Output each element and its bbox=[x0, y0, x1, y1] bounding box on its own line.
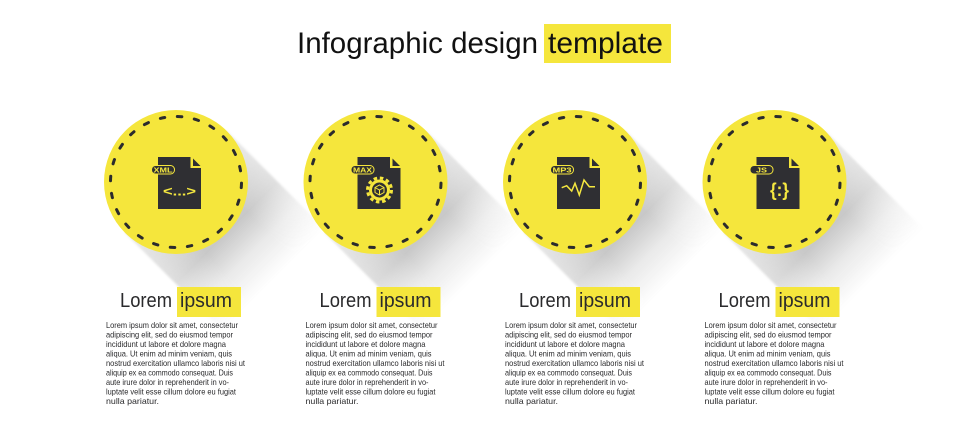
body text: aliqua. Ut enim ad minim veniam, quis bbox=[106, 348, 232, 358]
dashed ring bbox=[310, 116, 441, 248]
body text: aliquip ex ea commodo consequat. Duis bbox=[704, 368, 832, 378]
body text: aute irure dolor in reprehenderit in vo- bbox=[505, 377, 628, 387]
body text: luptate velit esse cillum dolore eu fugiat bbox=[704, 386, 835, 396]
heading: ipsum bbox=[778, 290, 830, 312]
heading: Lorem bbox=[519, 290, 571, 312]
long shadow bbox=[724, 132, 905, 292]
body text: aute irure dolor in reprehenderit in vo- bbox=[704, 377, 828, 387]
icon: XML file: XML bbox=[154, 166, 173, 175]
long shadow bbox=[325, 132, 506, 292]
panel: MAX file bbox=[304, 110, 524, 406]
icon: JS file bbox=[750, 157, 800, 209]
heading bbox=[718, 287, 840, 317]
title: Infographic design bbox=[297, 27, 538, 60]
body text: nulla pariatur. bbox=[106, 396, 159, 406]
icon: XML file bbox=[152, 157, 201, 209]
body text: aute irure dolor in reprehenderit in vo- bbox=[306, 377, 429, 387]
yellow circle bbox=[503, 110, 647, 254]
panel: XML file bbox=[104, 110, 325, 406]
yellow circle bbox=[304, 110, 448, 254]
body text: adipiscing elit, sed do eiusmod tempor bbox=[704, 330, 832, 340]
yellow circle bbox=[104, 110, 248, 254]
body text: incididunt ut labore et dolore magna bbox=[306, 339, 426, 349]
body text: nulla pariatur. bbox=[505, 396, 558, 406]
body text: nostrud exercitation ullamco laboris nisi ut bbox=[106, 358, 246, 368]
body text: aliquip ex ea commodo consequat. Duis bbox=[505, 368, 632, 378]
heading bbox=[320, 287, 440, 317]
panel: MP3 file bbox=[503, 110, 724, 406]
heading: ipsum bbox=[579, 290, 631, 312]
body text: luptate velit esse cillum dolore eu fugiat bbox=[106, 386, 237, 396]
body text: incididunt ut labore et dolore magna bbox=[505, 339, 625, 349]
body text: Lorem ipsum dolor sit amet, consectetur bbox=[106, 320, 238, 330]
body text: Lorem ipsum dolor sit amet, consectetur bbox=[505, 320, 637, 330]
heading: ipsum bbox=[180, 290, 232, 312]
long shadow bbox=[126, 132, 306, 292]
body text: aliquip ex ea commodo consequat. Duis bbox=[306, 368, 432, 378]
icon: MP3 file bbox=[550, 157, 600, 209]
body text: nostrud exercitation ullamco laboris nisi ut bbox=[704, 358, 844, 368]
body text: adipiscing elit, sed do eiusmod tempor bbox=[306, 330, 433, 340]
body text: luptate velit esse cillum dolore eu fugiat bbox=[505, 386, 636, 396]
panel: JS file bbox=[702, 110, 924, 406]
heading bbox=[519, 287, 640, 317]
yellow circle bbox=[702, 110, 846, 254]
body text: Lorem ipsum dolor sit amet, consectetur bbox=[306, 320, 438, 330]
body text: aliqua. Ut enim ad minim veniam, quis bbox=[505, 348, 631, 358]
dashed ring bbox=[110, 116, 242, 248]
heading: Lorem bbox=[718, 290, 770, 312]
body text: nulla pariatur. bbox=[306, 396, 358, 406]
body text: Lorem ipsum dolor sit amet, consectetur bbox=[704, 320, 837, 330]
body text bbox=[704, 320, 844, 406]
icon: XML file: <...> bbox=[163, 184, 197, 198]
body text bbox=[306, 320, 445, 406]
body text: nostrud exercitation ullamco laboris nisi ut bbox=[306, 358, 445, 368]
icon: MP3 file: MP3 bbox=[552, 166, 572, 175]
long shadow bbox=[524, 132, 706, 292]
heading bbox=[120, 287, 241, 317]
body text: incididunt ut labore et dolore magna bbox=[704, 339, 825, 349]
title: template bbox=[548, 27, 663, 60]
body text: adipiscing elit, sed do eiusmod tempor bbox=[106, 330, 233, 340]
body text: aliqua. Ut enim ad minim veniam, quis bbox=[306, 348, 432, 358]
body text: adipiscing elit, sed do eiusmod tempor bbox=[505, 330, 632, 340]
body text bbox=[106, 320, 246, 406]
body text: luptate velit esse cillum dolore eu fugiat bbox=[306, 386, 436, 396]
heading: ipsum bbox=[380, 290, 432, 312]
icon: MAX file bbox=[351, 157, 400, 209]
dashed ring bbox=[510, 116, 640, 248]
body text: nostrud exercitation ullamco laboris nisi ut bbox=[505, 358, 645, 368]
dashed ring bbox=[709, 116, 840, 248]
body text: nulla pariatur. bbox=[704, 396, 758, 406]
heading: Lorem bbox=[120, 290, 172, 312]
body text: incididunt ut labore et dolore magna bbox=[106, 339, 226, 349]
body text bbox=[505, 320, 645, 406]
body text: aliquip ex ea commodo consequat. Duis bbox=[106, 368, 233, 378]
title bbox=[297, 24, 671, 63]
icon: JS file: {:} bbox=[770, 180, 789, 200]
body text: aute irure dolor in reprehenderit in vo- bbox=[106, 377, 229, 387]
icon: JS file: JS bbox=[756, 166, 767, 175]
body text: aliqua. Ut enim ad minim veniam, quis bbox=[704, 348, 830, 358]
icon: MAX file: MAX bbox=[353, 166, 372, 175]
heading: Lorem bbox=[320, 290, 372, 312]
